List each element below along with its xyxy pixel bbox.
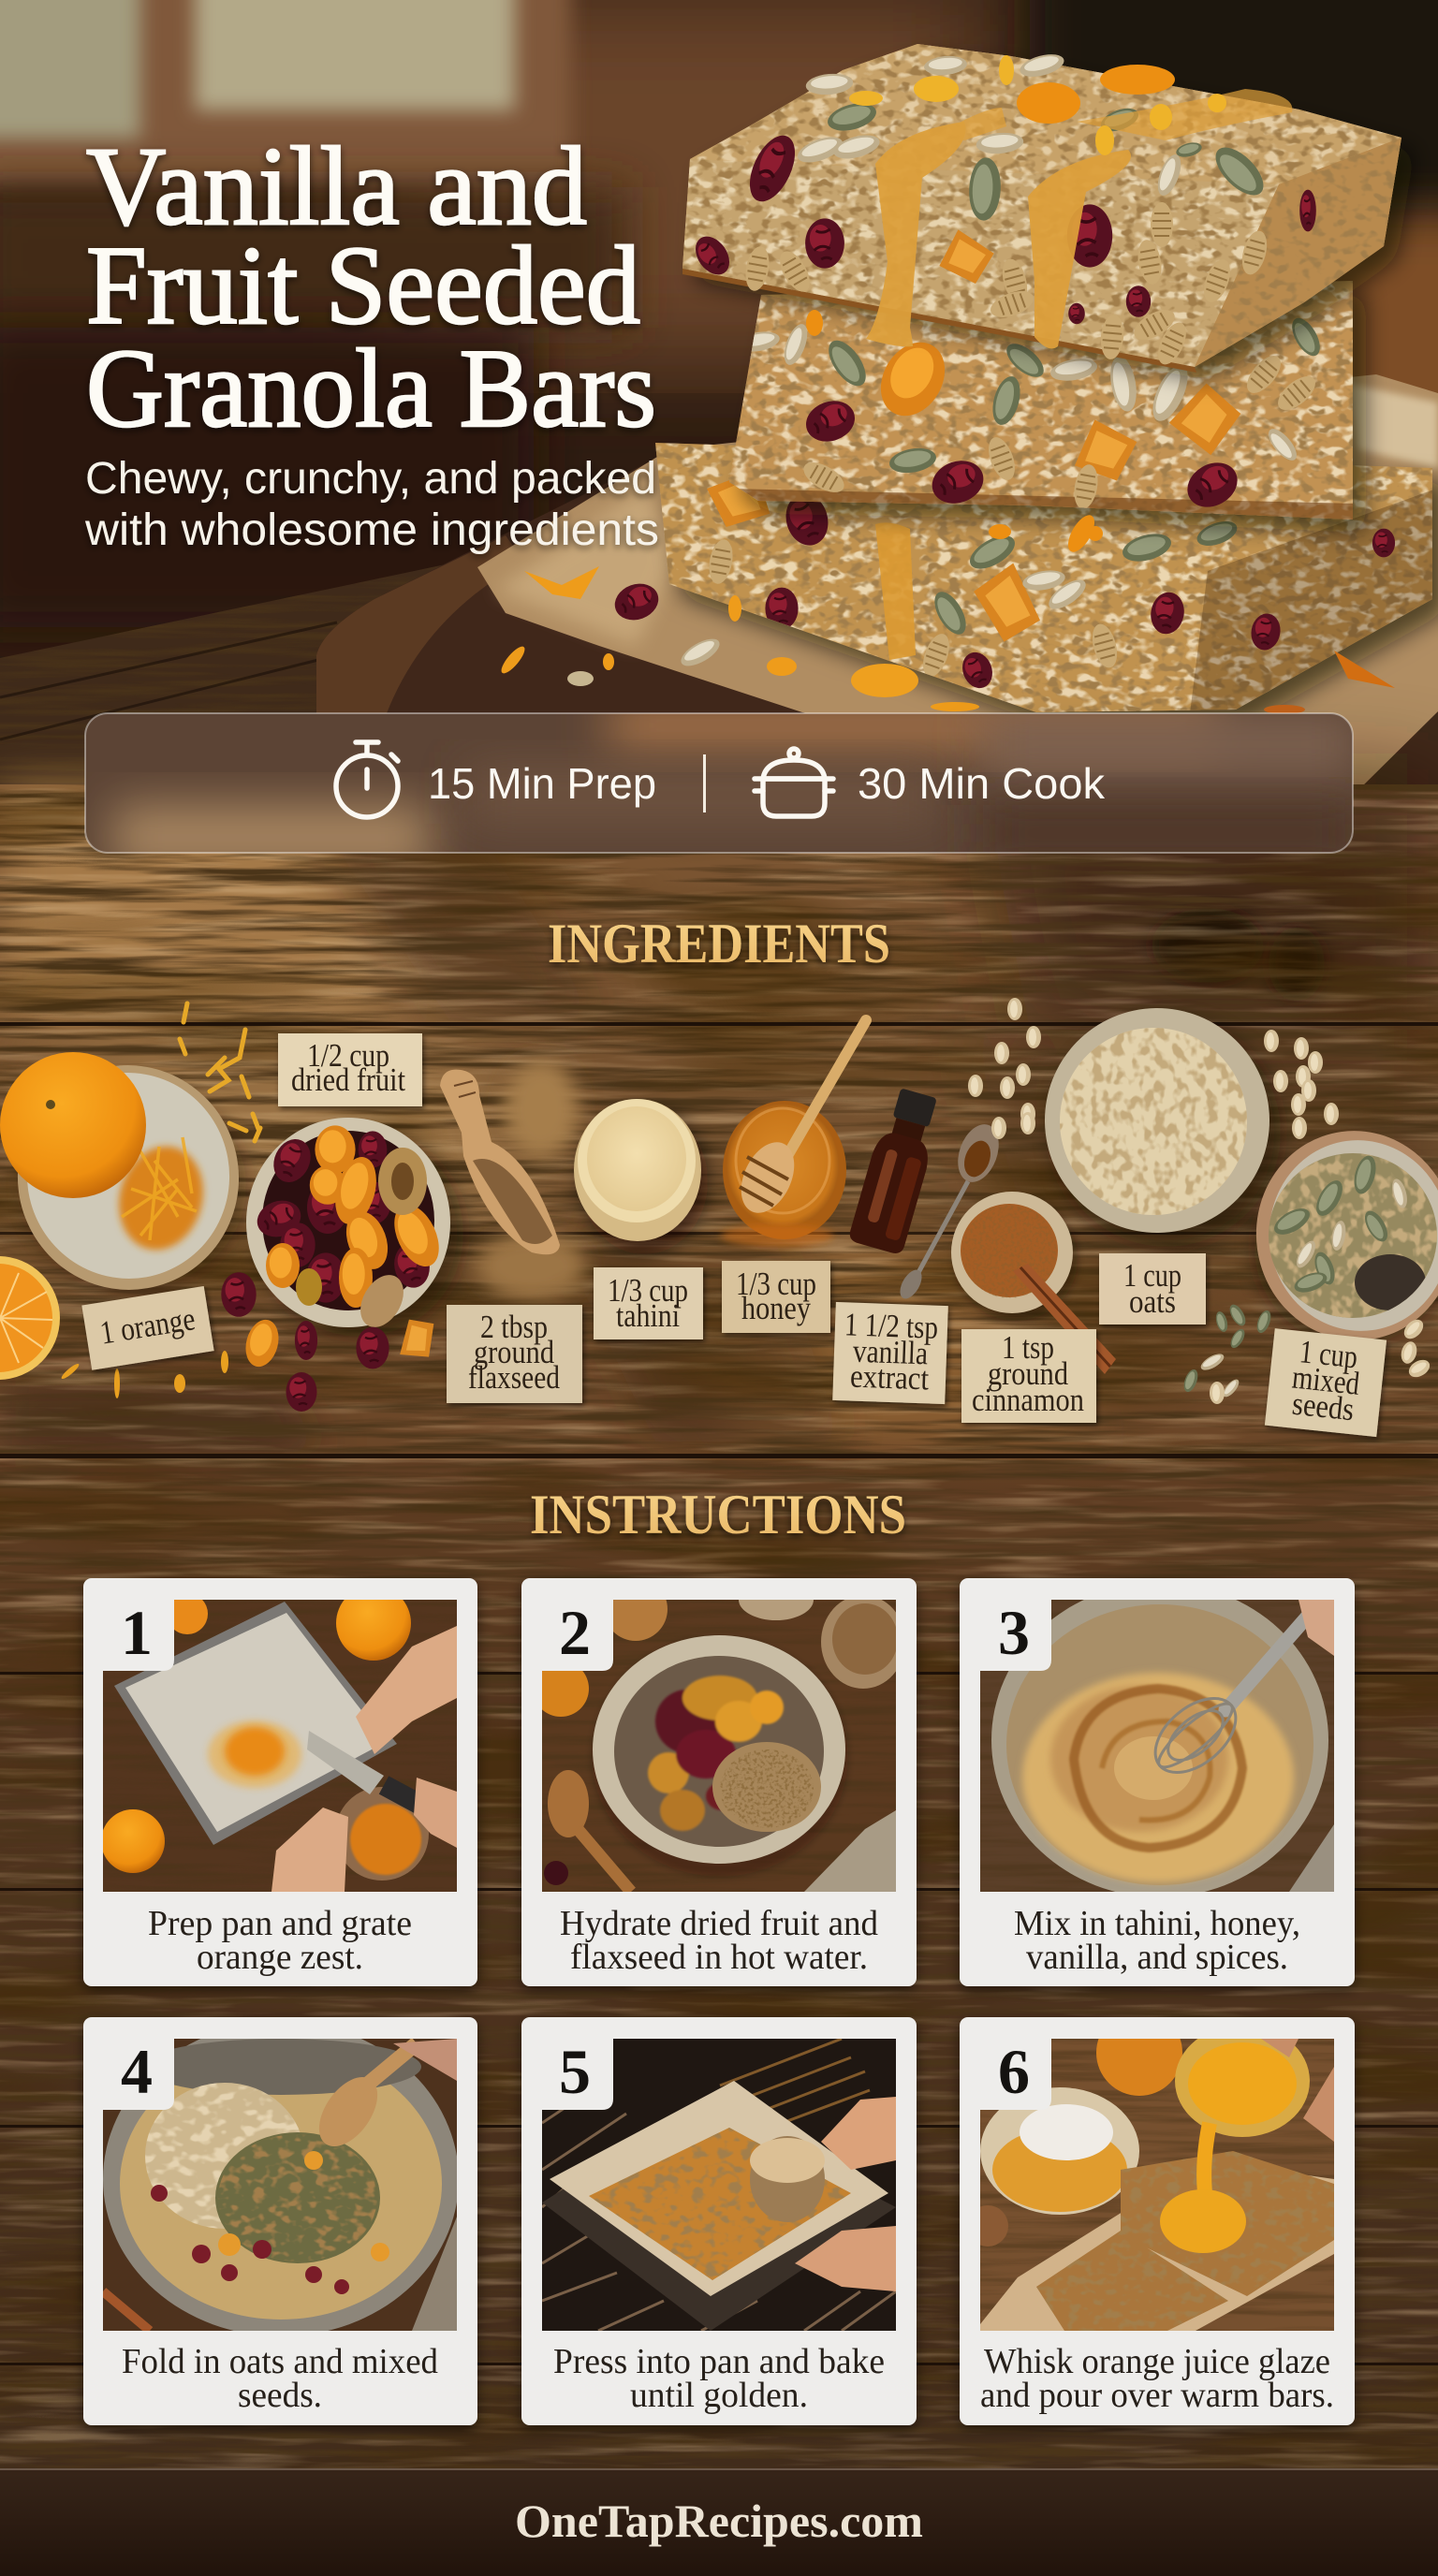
step 1 caption (148, 1904, 412, 1977)
step 5 number (542, 2036, 613, 2110)
crumbs on parchment (498, 566, 1395, 714)
label: dried fruit: dried fruit (291, 1061, 405, 1098)
step 3 photo (980, 1600, 1334, 1892)
label: honey: honey (741, 1290, 811, 1326)
step 2 caption: flaxseed in hot water. (570, 1938, 868, 1977)
step 6 photo (980, 2039, 1334, 2331)
step 3 caption: Mix in tahini, honey, (1014, 1904, 1300, 1943)
parchment (477, 374, 1438, 796)
wood background: ingredients and instructions (0, 784, 1438, 2471)
label: mixed seeds (1265, 1328, 1387, 1437)
step 4 number: 4 (121, 2036, 153, 2107)
oats bowl (1024, 988, 1290, 1253)
footer band (0, 2468, 1438, 2576)
cook time: 30 Min Cook (858, 759, 1106, 808)
step 1 caption: Prep pan and grate (148, 1904, 412, 1943)
step 6 caption: and pour over warm bars. (980, 2376, 1334, 2415)
step 1 caption: orange zest. (197, 1938, 363, 1977)
step 2 caption (560, 1904, 878, 1977)
label: dried fruit (278, 1033, 422, 1106)
glaze drips (866, 89, 1292, 348)
step 5 caption: Press into pan and bake (553, 2342, 885, 2381)
step 1 photo (103, 1600, 457, 1892)
label: mixed seeds: 1 cup (1298, 1333, 1359, 1375)
label: tahini: tahini (616, 1297, 680, 1334)
hero subtitle (84, 454, 659, 555)
honey jar and dipper (721, 1020, 866, 1247)
label: orange (81, 1286, 214, 1370)
hero title: Fruit Seeded (86, 223, 640, 347)
dried fruit bowl (221, 1118, 463, 1412)
step 5 photo (542, 2039, 896, 2331)
cutting board (399, 462, 712, 711)
time pill (85, 702, 1357, 871)
icon: stopwatch (336, 742, 398, 817)
mixed seeds bowl (1242, 1118, 1438, 1354)
label: mixed seeds: mixed (1290, 1358, 1362, 1402)
loose oats and seeds (968, 998, 1432, 1404)
step 4 number (103, 2036, 174, 2110)
step 2 number: 2 (559, 1597, 591, 1668)
hero title (86, 124, 656, 450)
cinnamon stick (1013, 1264, 1116, 1374)
label: dried fruit: 1/2 cup (307, 1037, 389, 1074)
step 3 number: 3 (998, 1597, 1030, 1668)
ingredient labels (81, 1033, 1387, 1437)
vanilla bottle (847, 1086, 946, 1255)
label: honey: 1/3 cup (736, 1266, 816, 1302)
step 5 caption: until golden. (630, 2376, 808, 2415)
label: vanilla: vanilla (852, 1333, 929, 1371)
step 3 number (980, 1597, 1051, 1671)
vanilla spoon (896, 1119, 1006, 1302)
heading: ingredients: INGREDIENTS (548, 913, 890, 974)
hero subtitle: Chewy, crunchy, and packed (85, 454, 656, 504)
step 5 caption (553, 2342, 885, 2415)
label: cinnamon: cinnamon (972, 1382, 1084, 1418)
ingredients display (0, 988, 1438, 1437)
label: tahini: 1/3 cup (608, 1272, 688, 1309)
label: vanilla: 1 1/2 tsp (844, 1306, 939, 1346)
step 6 number: 6 (998, 2036, 1030, 2107)
label: oats: oats (1129, 1283, 1176, 1320)
step 1 number: 1 (121, 1597, 153, 1668)
step 1 number (103, 1597, 174, 1671)
step 6 card (960, 2010, 1355, 2425)
step 4 caption: Fold in oats and mixed (122, 2342, 438, 2381)
step 2 number (542, 1597, 613, 1671)
step 4 card (83, 2017, 477, 2425)
prep time: 15 Min Prep (428, 759, 656, 808)
label: cinnamon: ground (988, 1355, 1068, 1392)
label: mixed seeds: seeds (1290, 1385, 1356, 1427)
step 2 photo (542, 1600, 896, 1892)
step 4 photo (103, 2039, 457, 2331)
hero title: Vanilla and (86, 124, 587, 248)
step 3 card (960, 1578, 1355, 1986)
step 2 caption: Hydrate dried fruit and (560, 1904, 878, 1943)
halved orange (0, 1256, 60, 1380)
label: flaxseed (447, 1305, 582, 1403)
hero photo: stacked granola bars (0, 0, 1438, 796)
label: vanilla: extract (849, 1358, 930, 1397)
step 6 caption: Whisk orange juice glaze (984, 2342, 1330, 2381)
warm light and shadows (0, 784, 1438, 2471)
hero subtitle: with wholesome ingredients (84, 505, 659, 555)
label: cinnamon: 1 tsp (1002, 1329, 1054, 1366)
table (0, 565, 1438, 784)
website: OneTapRecipes.com (515, 2495, 923, 2547)
step 3 caption: vanilla, and spices. (1026, 1938, 1288, 1977)
whole orange (0, 1052, 146, 1198)
step 4 caption: seeds. (238, 2376, 322, 2415)
step 1 card (83, 1578, 477, 1986)
tahini jar (574, 1099, 708, 1254)
label: honey (722, 1261, 830, 1333)
hero title: Granola Bars (86, 326, 656, 450)
icon: cooking pot (755, 749, 833, 816)
window panes (0, 0, 571, 187)
label: flaxseed: 2 tbsp (480, 1309, 548, 1345)
middle bar (729, 281, 1353, 520)
step 5 number: 5 (559, 2036, 591, 2107)
label: tahini (594, 1267, 703, 1339)
top bar (682, 44, 1401, 367)
bottom bar (655, 443, 1432, 712)
label: flaxseed: ground (474, 1334, 554, 1370)
step 5 card (521, 2017, 917, 2425)
step 2 card (521, 1577, 917, 1986)
cinnamon bowl (951, 1192, 1116, 1374)
label: oats (1099, 1253, 1206, 1325)
label: flaxseed: flaxseed (468, 1359, 560, 1396)
label: orange: 1 orange (97, 1300, 198, 1352)
step 6 caption (980, 2342, 1334, 2415)
orange and zest plate (0, 1003, 260, 1398)
heading: instructions: INSTRUCTIONS (530, 1484, 906, 1545)
flaxseed and scoop (440, 1061, 586, 1299)
label: cinnamon (961, 1329, 1096, 1423)
label: oats: 1 cup (1123, 1257, 1181, 1294)
step 6 number (980, 2036, 1051, 2110)
step 4 caption (122, 2342, 438, 2415)
label: vanilla (832, 1302, 948, 1404)
loose zest (180, 1003, 260, 1141)
step 3 caption (1014, 1904, 1300, 1977)
